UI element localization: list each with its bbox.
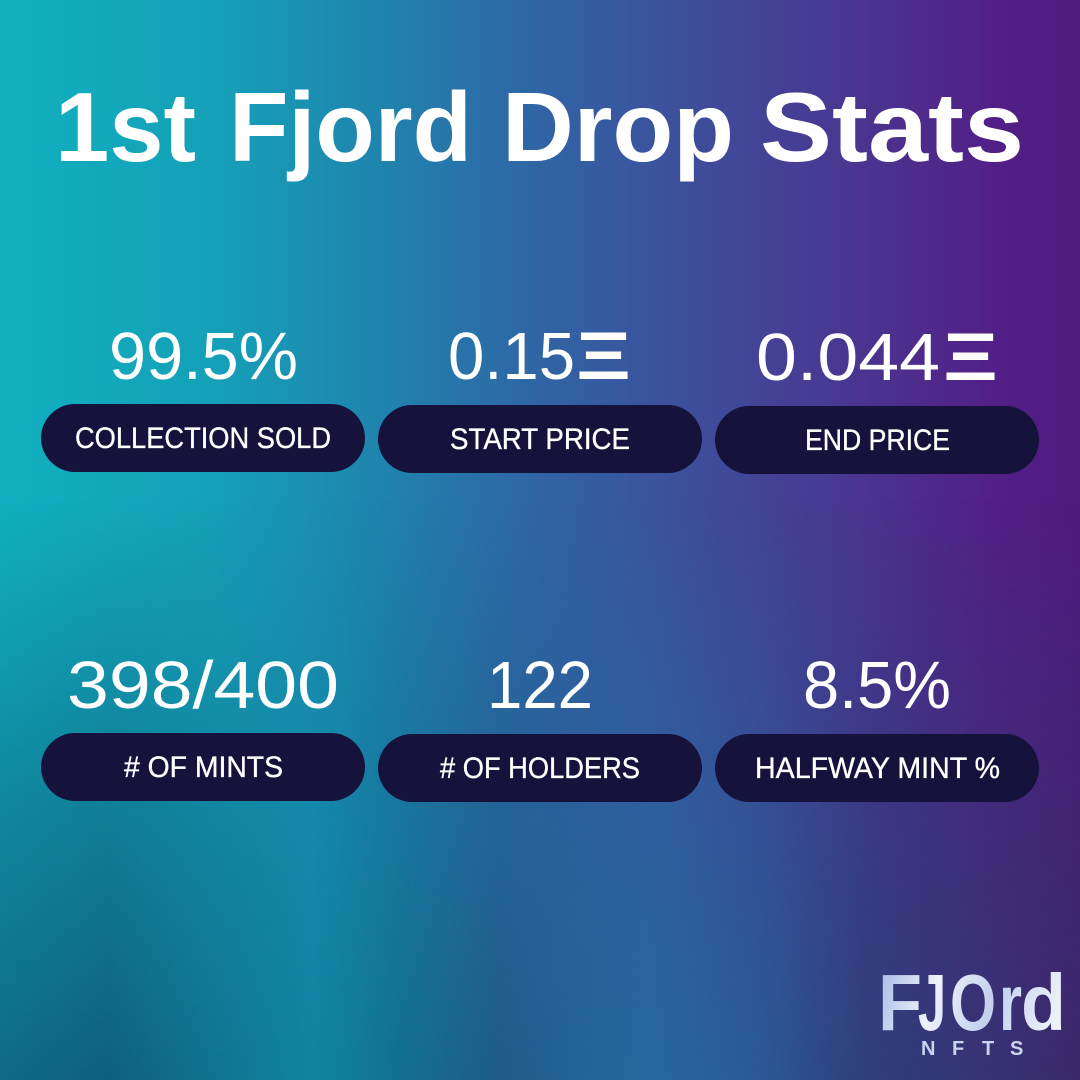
logo: Fjord NFTS: r — [999, 958, 1022, 1047]
value: 398/400: 398/400 — [67, 648, 339, 723]
stat: mints — [41, 648, 365, 801]
pill: collection sold: COLLECTION SOLD — [75, 422, 331, 455]
logo: Fjord NFTS: O — [950, 958, 996, 1047]
title: Fjord — [229, 72, 472, 182]
logo: Fjord NFTS: F — [878, 958, 922, 1047]
title — [55, 72, 1024, 182]
pill: collection sold — [41, 404, 365, 472]
pill: number of mints: # OF MINTS — [124, 751, 283, 784]
pill: number of mints — [41, 733, 365, 801]
value: 0.044 ether: Ξ — [943, 319, 998, 395]
logo: Fjord NFTS: d — [1021, 958, 1066, 1047]
value: 0.044 ether — [756, 319, 998, 395]
pill: start price: START PRICE — [450, 423, 630, 456]
title: Drop — [502, 72, 734, 182]
value: 8.5%: 8.5% — [803, 648, 951, 723]
pill: number of holders — [378, 734, 702, 802]
title: 1st — [55, 72, 196, 182]
pill: end price — [715, 406, 1039, 474]
logo: Fjord NFTS — [878, 958, 1066, 1060]
stat: holders — [378, 648, 702, 802]
stat: halfway mint — [715, 648, 1039, 802]
value: 122: 122 — [487, 648, 593, 723]
value: 0.15 ether: Ξ — [576, 318, 631, 394]
pill: halfway mint percent — [715, 734, 1039, 802]
title: Stats — [760, 72, 1024, 182]
logo: Fjord NFTS: J — [918, 958, 946, 1047]
pill: start price — [378, 405, 702, 473]
pill: number of holders: # OF HOLDERS — [440, 752, 640, 785]
value: 0.15 ether: 0.15 — [448, 319, 575, 394]
pill: halfway mint percent: HALFWAY MINT % — [755, 752, 1000, 785]
stat: collection sold — [41, 319, 365, 472]
pill: end price: END PRICE — [805, 424, 950, 457]
value: 99.5%: 99.5% — [109, 319, 298, 394]
value: 0.044 ether: 0.044 — [756, 320, 940, 395]
logo: Fjord NFTS: NFTS — [921, 1038, 1023, 1060]
stat: start price — [378, 318, 702, 473]
stat: end price — [715, 319, 1039, 474]
